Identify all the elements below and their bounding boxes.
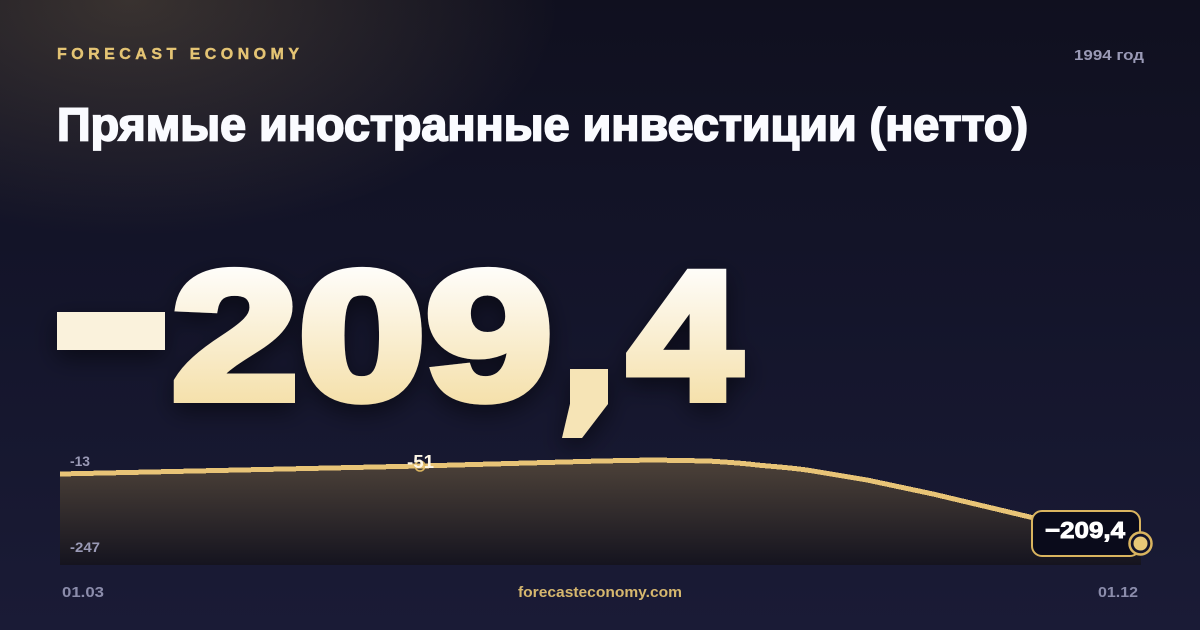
axis max label: -13	[70, 454, 91, 469]
value badge: −209,4	[1045, 517, 1125, 543]
end date: 01.12	[1098, 584, 1138, 601]
year label: 1994 год	[1074, 47, 1145, 64]
digits 209: 209	[172, 234, 552, 438]
mid value: -51	[407, 452, 434, 472]
start date: 01.03	[62, 584, 104, 601]
end marker	[1130, 532, 1152, 554]
mid marker	[415, 461, 425, 471]
line	[60, 460, 1034, 518]
big value	[57, 234, 741, 438]
axis min label: -247	[70, 540, 100, 555]
title: Прямые иностранные инвестиции (нетто)	[57, 98, 1028, 150]
brand label: FORECAST ECONOMY	[57, 46, 299, 63]
site url: forecasteconomy.com	[518, 584, 682, 601]
area under line	[60, 460, 1141, 565]
chart	[60, 452, 1152, 565]
minus sign bar	[57, 312, 165, 350]
comma	[562, 369, 608, 438]
value badge	[1032, 511, 1140, 556]
digit 4: 4	[628, 234, 741, 438]
